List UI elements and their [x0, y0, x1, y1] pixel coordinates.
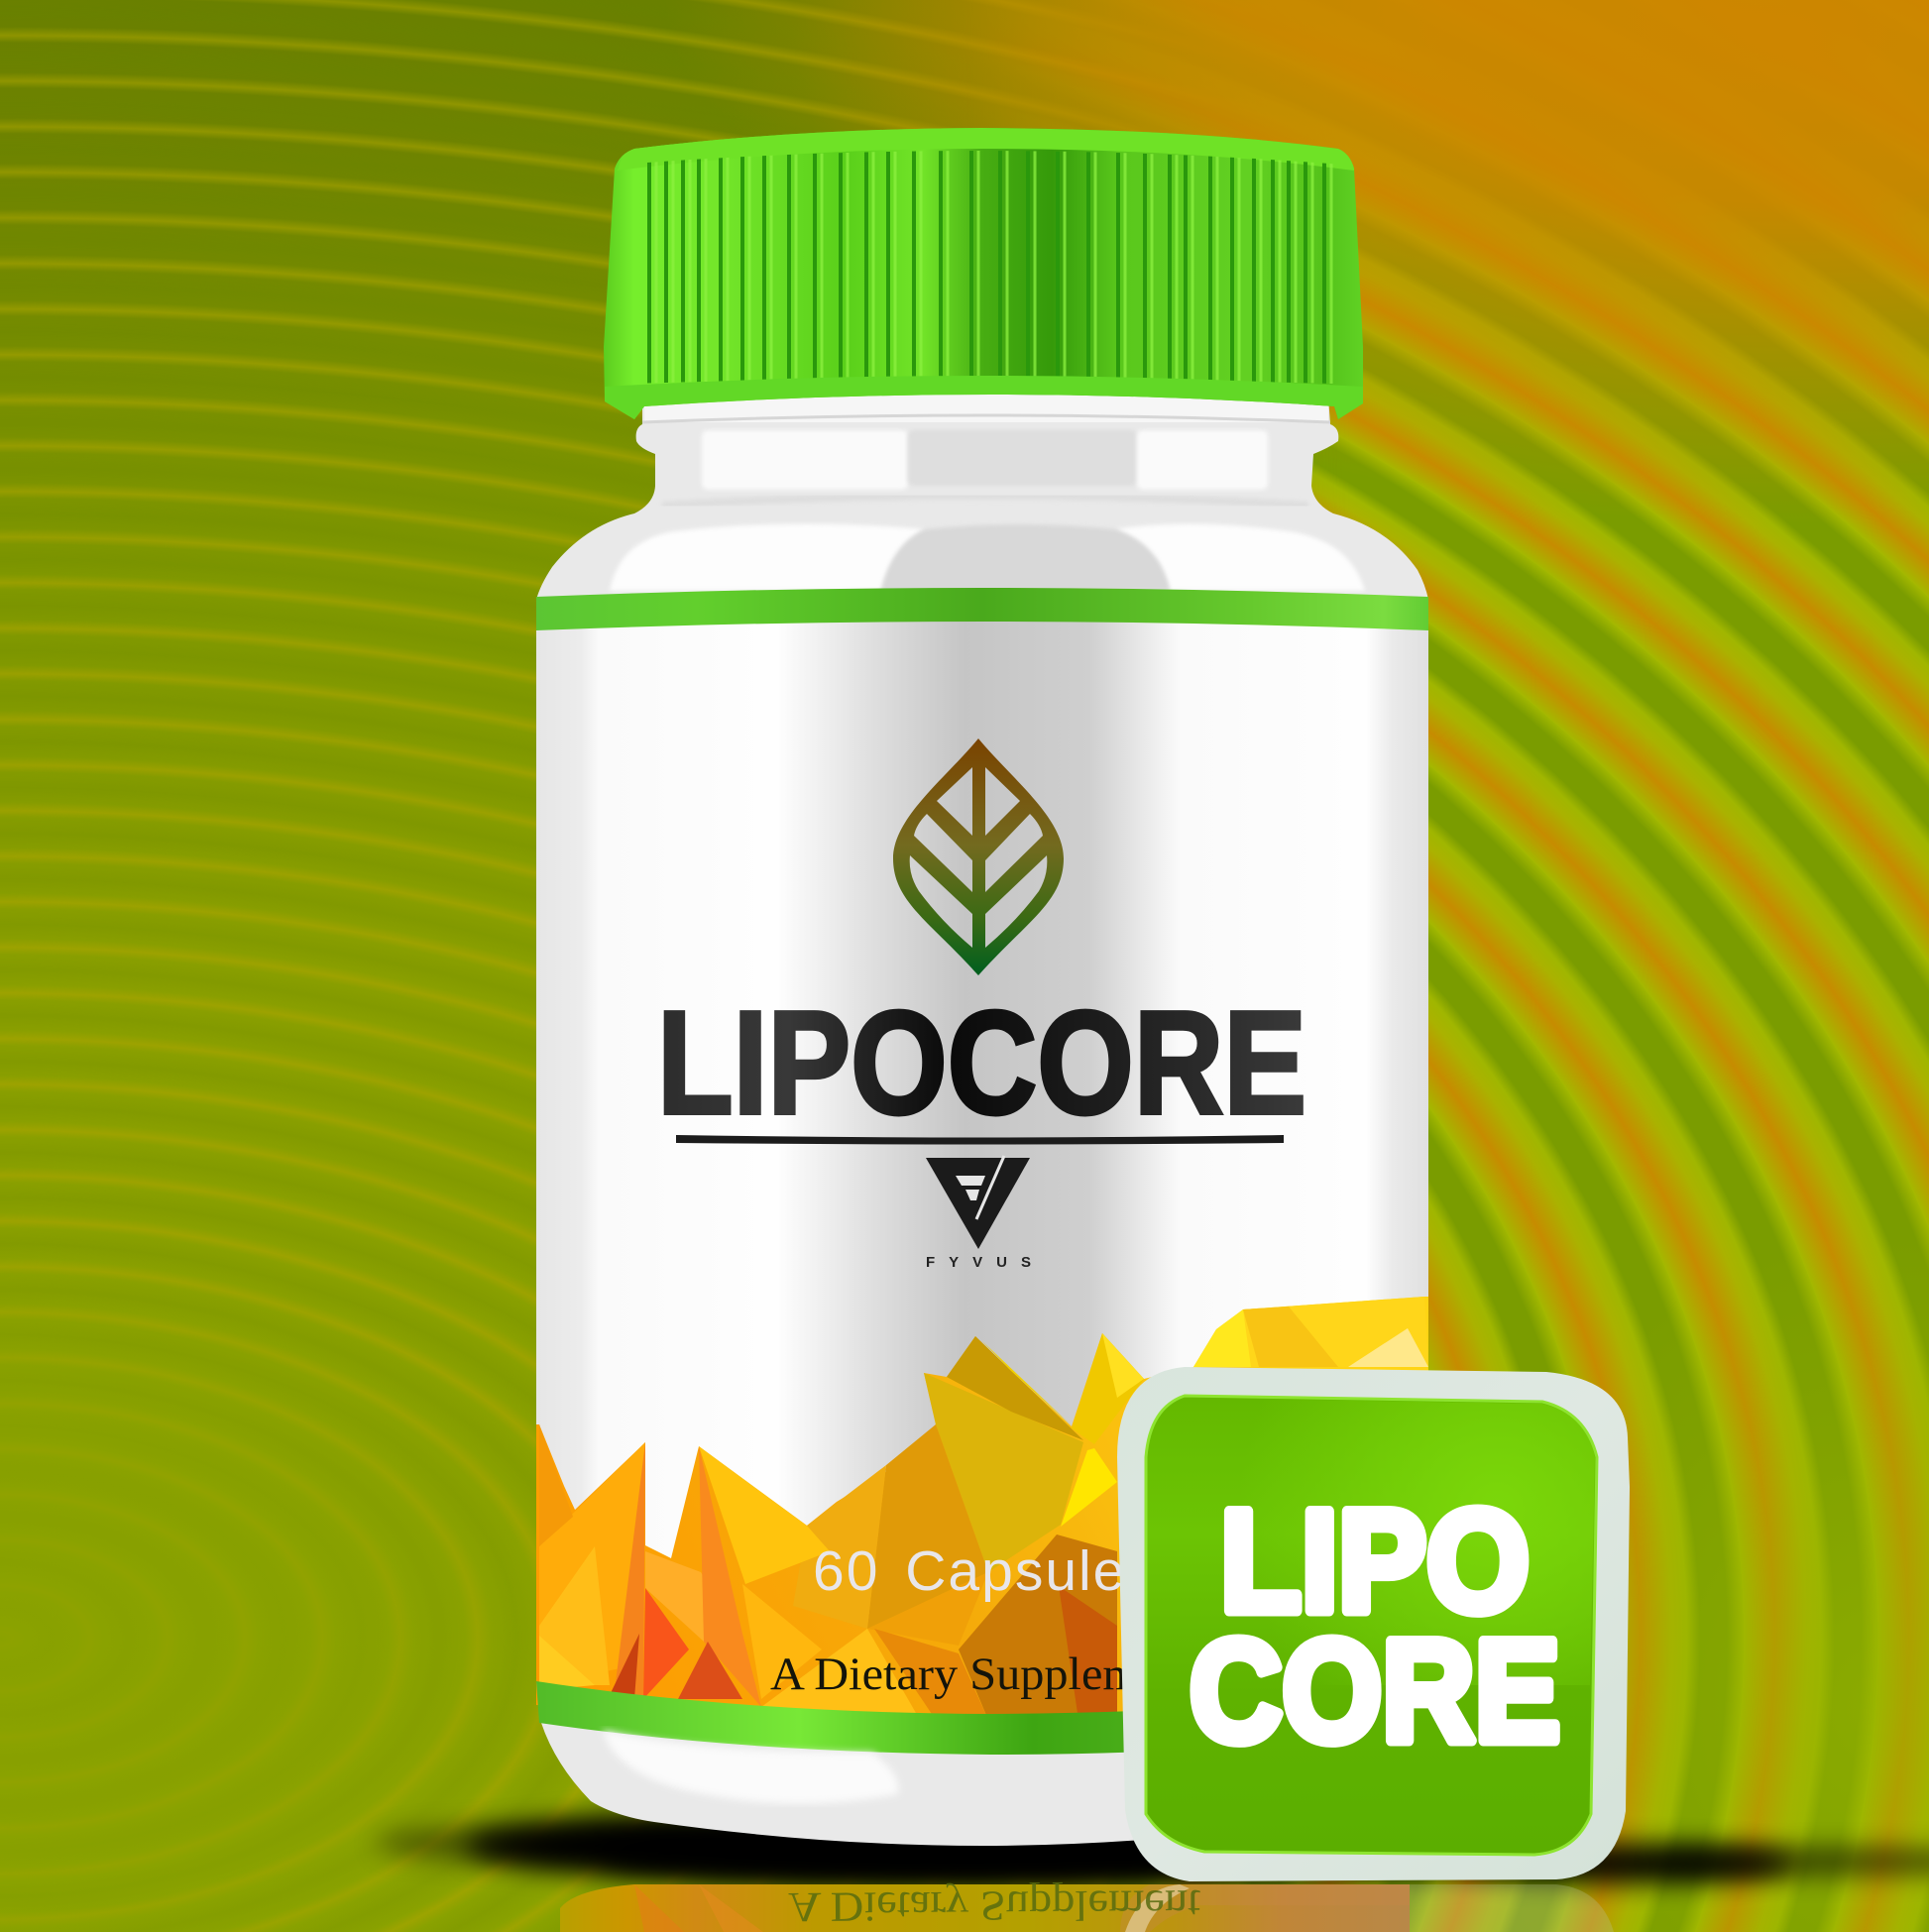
- lower bottle highlight: [603, 1730, 898, 1804]
- label bottom green band: [536, 1681, 1428, 1755]
- supplement bottle: [536, 128, 1428, 1846]
- badge: LIPO CORE: [1117, 1367, 1630, 1881]
- capsule count: 60 Capsules: [813, 1539, 1157, 1603]
- label panel: [536, 605, 1428, 1715]
- label top green band: [536, 588, 1428, 630]
- badge word LIPO: LIPO: [1220, 1480, 1530, 1642]
- neck highlights: [610, 395, 1365, 591]
- supplement line: A Dietary Supplement: [770, 1648, 1198, 1700]
- cap ribs: [649, 149, 1331, 389]
- badge frame: [1117, 1367, 1630, 1881]
- reflection facets: [634, 1884, 1257, 1932]
- badge word CORE: CORE: [1190, 1610, 1560, 1771]
- reflected supplement text: A Dietary Supplement: [788, 1880, 1200, 1930]
- floor shadow: [377, 1808, 1929, 1883]
- product name on label: LIPOCORE: [657, 981, 1306, 1145]
- reflection on floor: [560, 1880, 1614, 1932]
- icon: leaf logo: [893, 739, 1064, 975]
- divider under product name: [676, 1135, 1284, 1144]
- icon: FYVUS mark: [926, 1156, 1030, 1249]
- badge green face: [1146, 1396, 1597, 1855]
- low-poly flame artwork: [536, 1297, 1428, 1735]
- bottle body silhouette: [536, 397, 1428, 1846]
- reflection of badge: [1410, 1884, 1614, 1932]
- bottle cap: [604, 128, 1363, 419]
- brand name FYVUS: FYVUS: [926, 1254, 1031, 1271]
